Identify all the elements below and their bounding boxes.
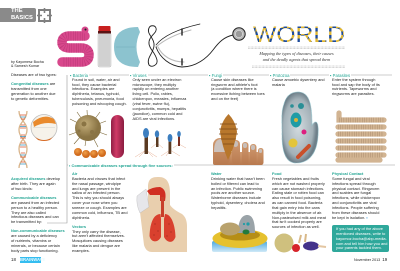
source: Air: common cold, influenza, TB and [72,210,128,215]
congenital diseases: Congenital diseases are [11,81,55,86]
logo background [20,257,41,263]
illustration: coiled parasite [338,113,384,160]
illustration: water ring [212,215,268,252]
text: Parasites: Enter the system through [332,77,375,82]
source: Physical Contact: infections, while chickenpox [332,195,380,200]
subtitle [259,50,334,62]
text: Parasites: food and sap the body of its [332,82,380,87]
source: Food: that isn't cooked properly are [272,219,322,224]
source: Air: cover your nose when you [72,200,117,205]
source: Physical Contact: physical contact. Ringworm [332,186,379,191]
heading: Parasites: ▪ Parasites [330,72,350,78]
source: Vectors [72,224,125,253]
non-communicable diseases: of nutrients, vitamins or [11,238,51,243]
source: Physical Contact: infections. People suffering [332,205,379,210]
callout text: your parents tackled them. [336,245,382,250]
heading: Bacteria: ▪ Bacteria [70,72,88,78]
illustration: protozoa [282,92,318,163]
dotted rules around subtitle [248,47,345,67]
text: Viruses: (jaundice), common cold and [132,111,182,116]
source: Physical Contact: be kept in isolation. ▪ [332,215,368,220]
icon: section crosshair [37,8,52,23]
text: Parasites: ringworms are parasites. [332,91,375,96]
illustration: petri dish [31,114,57,141]
callout box [332,225,389,252]
text: Fungi [211,77,265,101]
illustration: respiratory system figure [137,177,187,252]
congenital diseases: transmitted from one [11,86,47,91]
section tab: The Basics: BASICS [11,15,33,21]
acquired diseases: of two kinds: [11,186,33,191]
text: Parasites [332,77,380,96]
non-communicable diseases: minerals, or because certain [11,243,60,248]
source: Air: Bacteria and viruses that infect [72,176,125,181]
subtitle: and the deadly agents that spread them [263,56,330,62]
source: Vectors: Mosquitoes causing diseases [72,238,123,243]
acquired diseases: after birth. They are again [11,181,55,186]
source: Water [211,171,265,210]
heading: five sources: ▪ Communicable diseases spread through five sources: [69,162,173,168]
text: Viruses: living cell. Polio, rabies, [132,91,173,96]
source: Food: also result in food poisoning, [272,195,321,200]
text: Protozoa: malaria [272,82,285,87]
source: Air: and lungs are present in the [72,186,120,191]
text: Viruses: Only seen under an electron [132,77,181,82]
source: Water: hepatitis. [211,205,227,210]
text: Bacteria: diphtheria, tetanus, typhoid, [72,91,120,96]
intro text: Diseases are of two types: [11,72,57,77]
section tab: The Basics [0,8,36,22]
source: Air: Air [72,171,77,176]
text: Parasites: nutrients. Tapeworms and [332,86,376,91]
text: Viruses: AIDS are viral infections. [132,116,175,121]
source: Food [272,171,326,229]
callout text [336,226,388,250]
text: Bacteria: Found in soil, water, air and [72,77,120,82]
source: Food: Food [272,171,282,176]
source: Air: sneeze or cough. Examples are [72,205,127,210]
callout text: If you had any of the above [336,226,383,231]
byline [11,60,44,68]
divider lines [47,75,395,223]
source: Vectors: Vectors [72,224,86,229]
text: Fungi: excessive itching between toes [211,91,265,96]
source: Physical Contact: Some fungal and viral [332,176,370,181]
heading: Fungi: ▪ Fungi [209,72,222,78]
source: Water: an infection. Public swimming [211,186,262,191]
callout text: mentioned diseases, write to [336,231,385,236]
text: Fungi: (a condition where there is [211,86,257,91]
letter S: pink worm [62,26,89,62]
footer date: November 2013 19 [354,257,387,262]
source: Food: Eating stale or rotten food can [272,190,324,195]
source: Food: Fresh vegetables and fruits [272,176,319,181]
illustration: fungal toes [213,114,264,165]
source: Physical Contact: and conjunctivitis are viral [332,200,377,205]
text: Viruses: chickenpox, measles, influenza [132,96,186,101]
text: Fungi: Cause skin diseases like [211,77,254,82]
text: Bacteria: food, they cause bacterial [72,82,116,87]
letter I: pill bottle [98,26,111,67]
source: Food: can cause stomach infections. [272,186,324,191]
communicable diseases: They are also called [11,210,46,215]
source: Food: multiply in the absence of air. [272,210,322,215]
page number left: 18 [11,257,16,262]
communicable diseases [11,195,60,224]
source: Physical Contact [332,171,380,220]
text: Bacteria: tuberculosis, pneumonia, food [72,96,124,101]
byline: by Kayomesz Bocha [11,60,44,64]
communicable diseases: person to a healthy person. [11,205,58,210]
source: Physical Contact: Physical Contact [332,171,363,176]
congenital diseases: to genetic deformities. [11,96,49,101]
source: Vectors: like malaria and dengue are [72,243,120,248]
source: Vectors: but aren't affected themselves. [72,233,125,238]
non-communicable diseases [11,228,65,253]
congenital diseases: generation to another due [11,91,56,96]
communicable diseases: Communicable diseases [11,195,56,200]
source: Air [72,171,128,220]
text: Viruses: microscope, they multiply [132,82,176,87]
source: Vectors: examples. [72,248,90,253]
text: Bacteria [72,77,127,106]
illustration: food germs [274,234,326,252]
non-communicable diseases: are caused by a deficiency [11,233,57,238]
text: Viruses: (viral fever, swine flu), [132,101,170,106]
source: Physical Contact: and scabies are fungal [332,190,371,195]
text: Protozoa [272,77,325,87]
text: Fungi: and on the feet) [211,96,238,101]
source: Water: typhoid, dysentery, cholera and [211,200,265,205]
communicable diseases: infectious diseases and can [11,214,59,219]
source: Food: sources of infection as well. [272,224,320,229]
letter C: teal capsule half [114,27,140,67]
heading: Protozoa: ▪ Protozoa [270,72,289,78]
text: Bacteria: poisoning and whooping cough. [72,101,127,106]
subtitle: Mapping the types of diseases, their causes [259,50,334,56]
non-communicable diseases: Non-communicable diseases [11,228,65,233]
source: Air: saliva of an infected person. [72,190,120,195]
non-communicable diseases: body parts stop functioning. [11,248,59,253]
text: Viruses: rapidly on entering another [132,86,179,91]
illustration: DNA helix [19,111,27,168]
source: Food: Non-pasteurised milk and meat [272,215,326,220]
text: Protozoa: Cause amoebic dysentery and [272,77,325,82]
source: Physical Contact: infections spread through [332,181,376,186]
callout text: kayomoz.bocha@abp-media. [336,236,387,241]
text: Bacteria: infections. Examples are [72,86,114,91]
communicable diseases: are passed from an infected [11,200,59,205]
letter K: stethoscope [148,24,245,67]
section tab: The Basics: THE [11,8,23,14]
illustration: viruses [135,128,186,157]
acquired diseases [11,176,60,191]
text: Viruses [132,77,186,121]
source: Food: which are not washed properly [272,181,325,186]
heading: Viruses: ▪ Viruses [130,72,147,78]
source: Water: boiled or filtered can lead to [211,181,259,186]
callout text: com and tell him how you and [336,241,387,246]
source: Water: Water [211,171,222,176]
word: WORLD: WORLD [253,22,345,47]
magazine logo: BRAINWAVE [20,257,45,262]
illustration: bacteria [69,110,124,158]
source: Water: pools are another source. [211,190,255,195]
source: Air: the nasal passage, windpipe [72,181,121,186]
source: Water: Drinking water that hasn't been [211,176,265,181]
congenital diseases [11,81,56,101]
byline: & Samesh Kumar [11,64,39,68]
source: Food: as can canned food. Bacteria [272,200,322,205]
source: Air: diphtheria. [72,215,90,220]
source: Water: Waterborne diseases include [211,195,261,200]
text: Viruses: conjunctivitis, mumps, hepatitis [132,106,186,111]
source: Physical Contact: from these diseases should [332,210,379,215]
source: Food: that gain entry into the cans [272,205,320,210]
source: Vectors: They only carry the disease, [72,229,121,234]
source: Air: This is why you should always [72,195,124,200]
communicable diseases: be transmitted by: [11,219,42,224]
acquired diseases: Acquired diseases develop [11,176,60,181]
text: Fungi: ringworm and athlete's foot [211,82,258,87]
